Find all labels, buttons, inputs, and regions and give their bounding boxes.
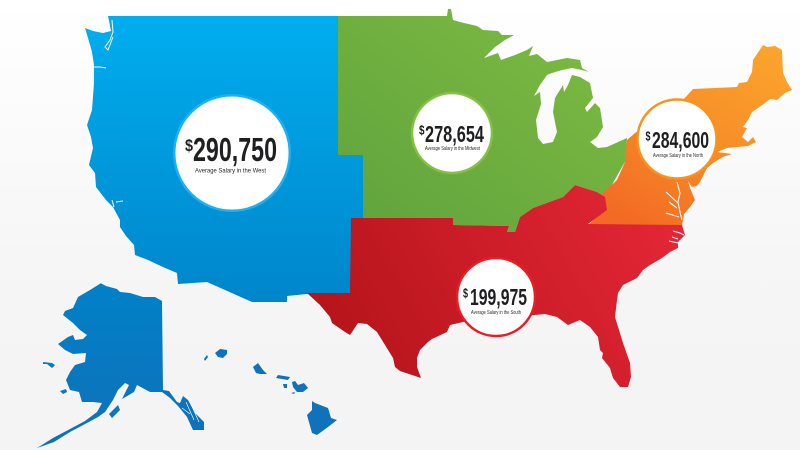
callout: West salary: Average Salary in the West xyxy=(195,168,266,174)
callout: South salary xyxy=(457,258,535,336)
region: West xyxy=(85,16,363,302)
callout: North salary: 284,600 xyxy=(652,127,709,153)
callout: South salary: 199,975 xyxy=(470,284,527,310)
callout: North salary: Average Salary in the North xyxy=(653,153,703,159)
callout: North salary: $ xyxy=(646,130,651,144)
region: South xyxy=(307,185,685,387)
callout: West salary xyxy=(174,95,290,211)
callout: West salary: $ xyxy=(185,136,193,155)
callout: Midwest salary: Average Salary in the Midwest xyxy=(425,146,480,152)
callout: Midwest salary: 278,654 xyxy=(425,121,484,147)
region: Midwest xyxy=(338,9,627,232)
callout: Midwest salary: $ xyxy=(419,124,425,138)
region: Alaska xyxy=(37,283,204,448)
callout: South salary: $ xyxy=(463,286,468,300)
callout: West salary: 290,750 xyxy=(193,132,277,169)
callout: South salary: Average Salary in the South xyxy=(471,310,521,316)
region: Hawaii xyxy=(204,349,337,435)
region: North xyxy=(588,45,792,226)
callout: North salary xyxy=(638,100,716,178)
callout: Midwest salary xyxy=(412,93,492,173)
